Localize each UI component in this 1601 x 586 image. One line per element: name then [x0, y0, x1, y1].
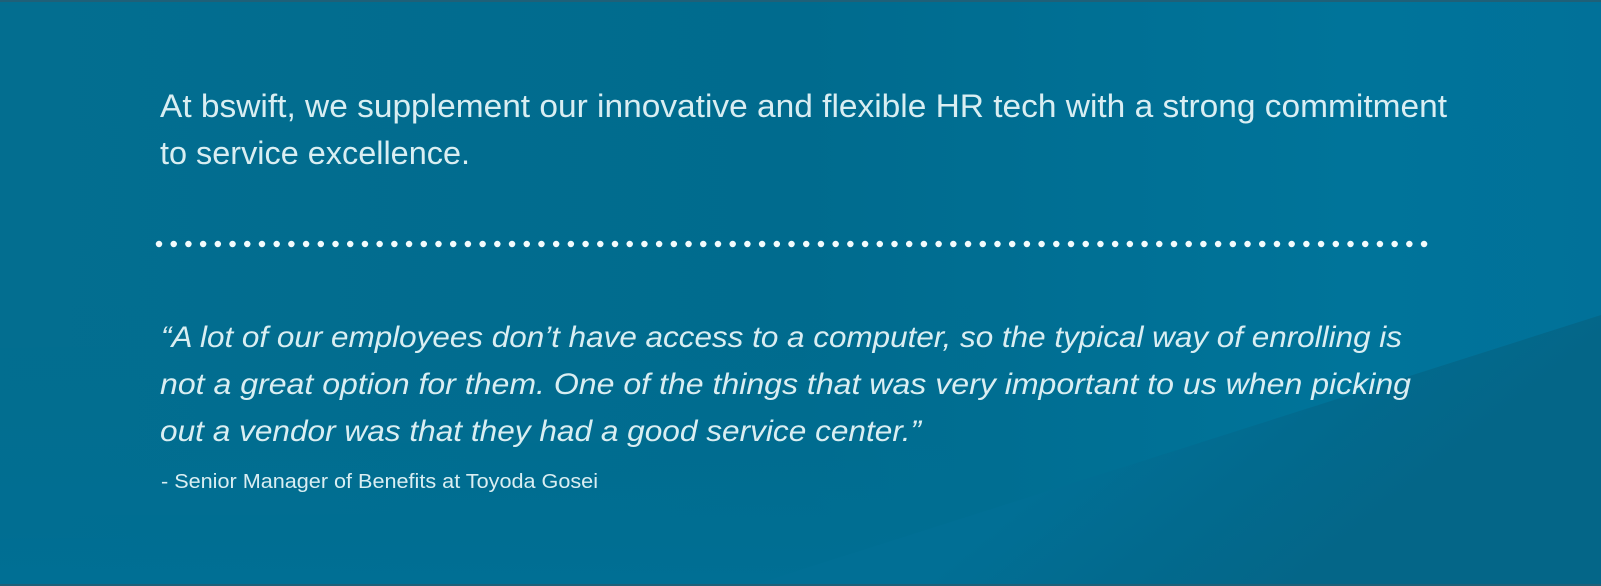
customer quote: not a great option for them. One of the things that was very important to us when picking	[160, 368, 1411, 401]
quote attribution: - Senior Manager of Benefits at Toyoda Gosei	[161, 471, 598, 493]
headline	[160, 88, 1447, 171]
customer quote	[160, 321, 1411, 448]
bottom edge	[0, 584, 1601, 586]
top edge	[0, 0, 1601, 2]
dotted divider	[159, 241, 1426, 247]
headline: to service excellence.	[160, 135, 470, 171]
background wedge	[750, 315, 1601, 586]
customer quote: “A lot of our employees don’t have access to a computer, so the typical way of enrolling is	[161, 321, 1402, 354]
headline: At bswift, we supplement our innovative and flexible HR tech with a strong commitment	[160, 88, 1447, 124]
lower background glow	[0, 300, 1000, 586]
customer quote: out a vendor was that they had a good service center.”	[160, 415, 923, 448]
